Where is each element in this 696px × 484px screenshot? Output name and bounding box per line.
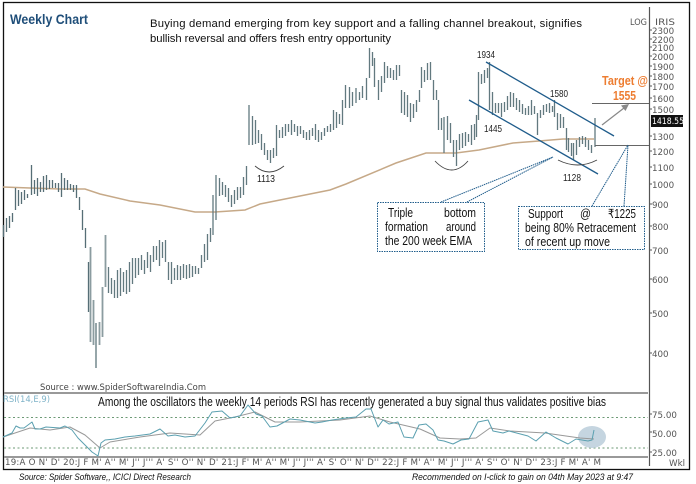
footer source: Source: Spider Software,, ICICI Direct Research [19, 472, 191, 483]
deep selloff bars [90, 235, 106, 368]
price axis: 1300 [652, 133, 674, 143]
RSI highlight [578, 426, 606, 448]
price axis [630, 7, 676, 466]
price axis: 500 [652, 310, 669, 320]
price axis: 700 [652, 247, 669, 257]
headline commentary: Buying demand emerging from key support and a falling channel breakout, signifies [150, 18, 582, 30]
channel lines [469, 62, 614, 174]
price axis: 2000 [652, 53, 674, 63]
pivot labels: 1934 [477, 49, 495, 61]
callout: triple bottom: the 200 week EMA [385, 234, 473, 248]
chart source: Source : www.SpiderSoftwareIndia.Com [40, 383, 206, 393]
price axis: 1000 [652, 181, 674, 191]
pivot labels: 1113 [257, 173, 275, 185]
RSI axis: 50.00 [652, 430, 677, 440]
RSI label: RSI(14,E,9) [3, 395, 50, 405]
price axis: 2200 [652, 36, 674, 46]
target label: 1555 [613, 89, 636, 103]
price axis: 1600 [652, 95, 674, 105]
last price tag: 1418.55 [652, 117, 684, 127]
callout: triple bottom [378, 202, 484, 252]
footer recommendation: Recommended on I-click to gain on 04th May 2023 at 9:47 [412, 472, 634, 483]
callout: triple bottom: around [446, 220, 476, 234]
price axis: IRIS [655, 18, 676, 28]
pivot labels: 1128 [563, 172, 581, 184]
RSI axis: Wkl [669, 459, 685, 469]
target arrow [602, 104, 629, 125]
headline commentary: bullish reversal and offers fresh entry opportunity [150, 33, 391, 45]
price axis: 2300 [652, 27, 674, 37]
title: Weekly Chart [10, 11, 88, 27]
callout: triple bottom: formation [385, 220, 428, 234]
callout: support: ₹1225 [608, 207, 636, 221]
price axis: 1700 [652, 83, 674, 93]
RSI panel separators [4, 393, 648, 457]
200 week EMA line [3, 139, 594, 212]
price axis: 400 [652, 350, 669, 360]
pivot labels: 1580 [550, 88, 568, 100]
RSI signal line [3, 412, 594, 448]
pattern arcs [255, 160, 597, 172]
callout: support [518, 206, 644, 250]
price axis: LOG [630, 18, 647, 28]
RSI axis [652, 411, 685, 469]
target and support lines [592, 104, 649, 146]
target label: Target @ [602, 74, 648, 88]
price axis: 2100 [652, 44, 674, 54]
price axis: 600 [652, 276, 669, 286]
price axis: 1200 [652, 148, 674, 158]
callout: support: Support [528, 207, 563, 221]
price axis: 1900 [652, 63, 674, 73]
RSI axis: 75.00 [652, 411, 677, 421]
price axis: 1100 [652, 164, 674, 174]
time axis: 19:A O N' D' 20:J F M' A'' M' J'' J''' A' S'' O'' N' D' 21:J F' M' A'' M' J'' J''' A' S' O'' N' D'' 22:J F M' A'' M' J'' J''' A' S'' O' N' D'' 23:J F M' A' M [5, 458, 601, 468]
RSI axis: 25.00 [652, 449, 677, 459]
price axis: 900 [652, 201, 669, 211]
callout: support: @ [580, 207, 591, 221]
price axis: 1800 [652, 73, 674, 83]
RSI line [3, 405, 594, 456]
callout: triple bottom: Triple [388, 206, 413, 220]
headline commentary [150, 18, 582, 45]
price bars [4, 165, 88, 312]
recovery bars [108, 48, 595, 298]
callout: support: being 80% Retracement [525, 221, 636, 235]
callout: support: of recent up move [525, 235, 610, 249]
target label [602, 74, 648, 103]
callout leader lines [441, 145, 628, 206]
pivot labels [257, 49, 581, 185]
price axis: 1500 [652, 106, 674, 116]
RSI reference levels [4, 418, 648, 448]
callout: triple bottom: bottom [444, 206, 476, 220]
price axis: 800 [652, 223, 669, 233]
pivot labels: 1445 [484, 123, 502, 135]
